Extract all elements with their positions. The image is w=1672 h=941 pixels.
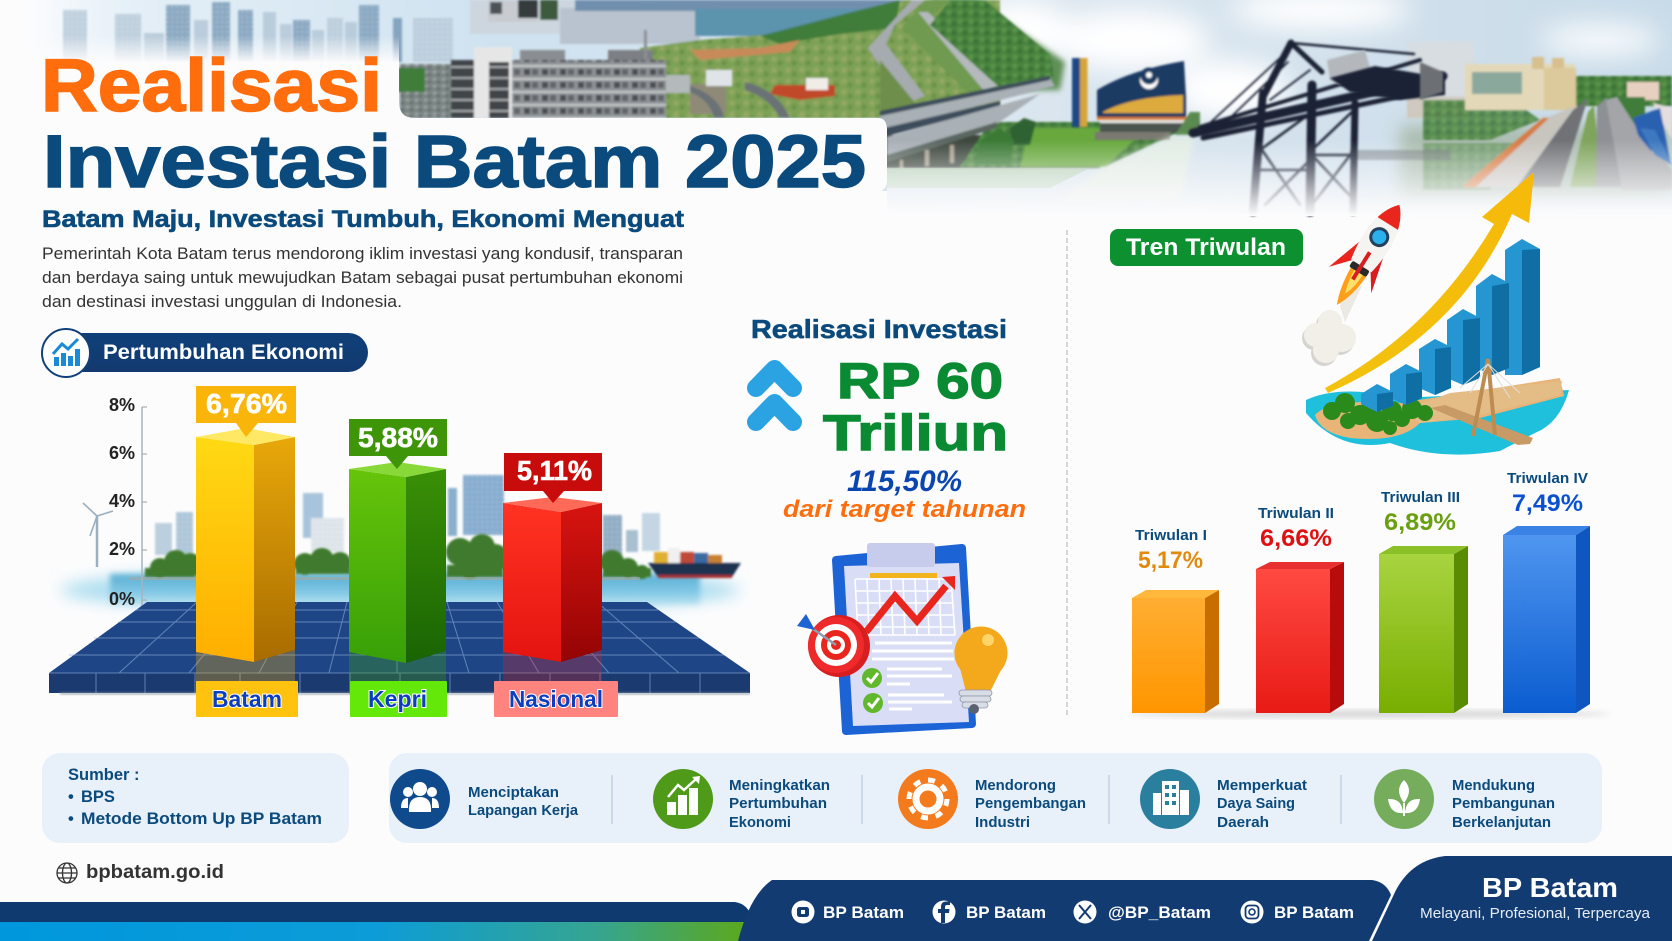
category labels: Nasional bbox=[509, 686, 603, 712]
bar: Triwulan III 6,89%: 6,89% bbox=[1384, 509, 1456, 536]
distant hill fading into sky bbox=[930, 0, 1065, 90]
highway upper road bbox=[868, 0, 925, 104]
benefit: Meningkatkan Pertumbuhan Ekonomi bbox=[653, 769, 830, 831]
illustration: rocket and growth island bbox=[1302, 172, 1569, 455]
bar: Batam 6,76% bbox=[196, 386, 296, 695]
social: X: @BP_Batam bbox=[1108, 903, 1211, 922]
icon: rising arrow bbox=[1325, 172, 1534, 393]
bar: Triwulan IV 7,49%: 7,49% bbox=[1512, 490, 1583, 517]
bar: Triwulan I 5,17% bbox=[1132, 528, 1219, 713]
benefit: Memperkuat Daya Saing Daerah: Daya Saing bbox=[1217, 796, 1295, 812]
y axis: 6% bbox=[109, 443, 135, 463]
bar: Batam 6,76%: 6,76% bbox=[206, 388, 287, 419]
icon: double chevron up bbox=[756, 369, 793, 422]
target percentage bbox=[783, 465, 1026, 523]
benefit: Mendorong Pengembangan Industri bbox=[898, 769, 1086, 831]
panel: benefits bbox=[389, 753, 1602, 843]
big value bbox=[823, 353, 1008, 461]
bar: Triwulan II 6,66%: Triwulan II bbox=[1258, 506, 1334, 522]
benefit: Mendorong Pengembangan Industri: Industri bbox=[975, 815, 1030, 831]
bar: Triwulan III 6,89%: Triwulan III bbox=[1381, 490, 1460, 506]
backdrop: waterfront city scene bbox=[60, 475, 741, 612]
big value: Triliun bbox=[823, 405, 1008, 461]
benefit: Mendorong Pengembangan Industri: Mendorong bbox=[975, 778, 1056, 794]
skyline bbox=[63, 2, 453, 62]
bar: Nasional 5,11%: 5,11% bbox=[517, 455, 592, 486]
category labels: Batam bbox=[212, 686, 282, 712]
bar: Triwulan IV 7,49% bbox=[1503, 471, 1590, 713]
panel: Sumber bbox=[42, 753, 349, 843]
bar: Triwulan IV 7,49%: Triwulan IV bbox=[1507, 471, 1588, 487]
y axis: 0% bbox=[109, 589, 135, 609]
benefit: Mendukung Pembangunan Berkelanjutan: Pembangunan bbox=[1452, 796, 1555, 812]
bar: Nasional 5,11% bbox=[503, 453, 602, 695]
floor platform bbox=[49, 602, 750, 695]
panel: Sumber: BPS bbox=[81, 788, 115, 806]
website: bpbatam.go.id bbox=[86, 862, 224, 883]
target percentage: 115,50% bbox=[847, 465, 962, 498]
benefit: Mendukung Pembangunan Berkelanjutan bbox=[1374, 769, 1555, 831]
category labels bbox=[196, 681, 618, 717]
brand panel: BP Batam bbox=[1482, 872, 1618, 903]
bar: Triwulan II 6,66%: 6,66% bbox=[1260, 525, 1332, 552]
icon: rocket bbox=[1302, 191, 1419, 366]
social: Instagram bbox=[1240, 900, 1354, 924]
panel: Sumber: • bbox=[68, 810, 74, 828]
subtitle: Batam Maju, Investasi Tumbuh, Ekonomi Menguat bbox=[42, 206, 684, 233]
panel: Sumber: • bbox=[68, 788, 74, 806]
benefit: Meningkatkan Pertumbuhan Ekonomi: Ekonomi bbox=[729, 815, 791, 831]
title: Realisasi bbox=[41, 44, 382, 127]
category labels: Kepri bbox=[368, 686, 427, 712]
benefit: Memperkuat Daya Saing Daerah bbox=[1140, 769, 1307, 831]
coastal photo bbox=[398, 0, 1054, 118]
divider bbox=[1066, 230, 1068, 717]
apartment block bbox=[451, 60, 666, 118]
panel: Sumber: Sumber : bbox=[68, 766, 140, 784]
bar: Triwulan I 5,17%: 5,17% bbox=[1138, 547, 1203, 574]
port crane bbox=[1193, 43, 1443, 212]
white cut-outs behind the title bbox=[0, 118, 887, 192]
social: Facebook bbox=[932, 900, 1046, 924]
bar: Triwulan III 6,89% bbox=[1379, 490, 1468, 713]
title bbox=[41, 44, 866, 203]
heading: Realisasi Investasi bbox=[751, 314, 1007, 344]
intro paragraph: dan berdaya saing untuk mewujudkan Batam sebagai pusat pertumbuhan ekonomi bbox=[42, 269, 683, 287]
y axis: 8% bbox=[109, 395, 135, 415]
heading: Tren Triwulan: Tren Triwulan bbox=[1126, 234, 1286, 261]
landmark monument bbox=[1072, 58, 1200, 140]
benefit: Menciptakan Lapangan Kerja bbox=[390, 769, 579, 829]
benefit: Mendukung Pembangunan Berkelanjutan: Berkelanjutan bbox=[1452, 815, 1551, 831]
header photo collage bbox=[0, 0, 1672, 217]
intro paragraph: Pemerintah Kota Batam terus mendorong iklim investasi yang kondusif, transparan bbox=[42, 245, 683, 263]
social: Instagram: BP Batam bbox=[1274, 903, 1354, 922]
footer bbox=[0, 856, 1672, 941]
y axis: 4% bbox=[109, 491, 135, 511]
y axis: 2% bbox=[109, 539, 135, 559]
right hand city photo bbox=[1400, 125, 1672, 200]
overpass and park bbox=[880, 76, 1200, 168]
social: Facebook: BP Batam bbox=[966, 903, 1046, 922]
benefit: Menciptakan Lapangan Kerja: Lapangan Kerja bbox=[468, 803, 579, 819]
benefit: Meningkatkan Pertumbuhan Ekonomi: Meningkatkan bbox=[729, 778, 830, 794]
social: YouTube: BP Batam bbox=[823, 903, 904, 922]
benefit: Menciptakan Lapangan Kerja: Menciptakan bbox=[468, 785, 559, 801]
benefit: Memperkuat Daya Saing Daerah: Daerah bbox=[1217, 815, 1269, 831]
big value: RP 60 bbox=[837, 353, 1003, 409]
benefit: Mendukung Pembangunan Berkelanjutan: Mendukung bbox=[1452, 778, 1535, 794]
bar: Triwulan II 6,66% bbox=[1256, 506, 1344, 713]
target percentage: dari target tahunan bbox=[783, 496, 1026, 523]
bar: Triwulan I 5,17%: Triwulan I bbox=[1135, 528, 1207, 544]
intro paragraph: dan destinasi investasi unggulan di Indonesia. bbox=[42, 293, 402, 311]
icon: wind turbine bbox=[83, 503, 113, 567]
icon: island with bridge and bars bbox=[1306, 239, 1569, 455]
bar: Kepri 5,88% bbox=[349, 419, 447, 695]
social: X bbox=[1074, 900, 1211, 924]
social: YouTube bbox=[792, 900, 904, 924]
benefit: Memperkuat Daya Saing Daerah: Memperkuat bbox=[1217, 778, 1307, 794]
panel: Realisasi Investasi bbox=[751, 314, 1026, 731]
intro paragraph bbox=[42, 245, 683, 311]
benefit: Meningkatkan Pertumbuhan Ekonomi: Pertumbuhan bbox=[729, 796, 827, 812]
brand panel bbox=[1372, 856, 1672, 941]
y axis bbox=[109, 395, 147, 622]
panel: Sumber: Metode Bottom Up BP Batam bbox=[81, 810, 322, 828]
heading: Pertumbuhan Ekonomi bbox=[42, 329, 368, 377]
benefit: Mendorong Pengembangan Industri: Pengembangan bbox=[975, 796, 1086, 812]
title: Investasi Batam 2025 bbox=[43, 120, 866, 203]
chart: Pertumbuhan Ekonomi bbox=[49, 386, 750, 717]
social bar bbox=[738, 880, 1391, 941]
footer stripes bbox=[0, 902, 752, 941]
brand panel: Melayani, Profesional, Terpercaya bbox=[1420, 905, 1651, 922]
icon: container ship bbox=[648, 548, 741, 578]
bar: Kepri 5,88%: 5,88% bbox=[358, 422, 438, 453]
heading: Pertumbuhan Ekonomi: Pertumbuhan Ekonomi bbox=[103, 341, 344, 364]
heading: Tren Triwulan bbox=[1110, 229, 1303, 266]
chart: Tren Triwulan bbox=[1130, 471, 1610, 718]
icon: clipboard with target and bulb bbox=[797, 543, 1008, 731]
